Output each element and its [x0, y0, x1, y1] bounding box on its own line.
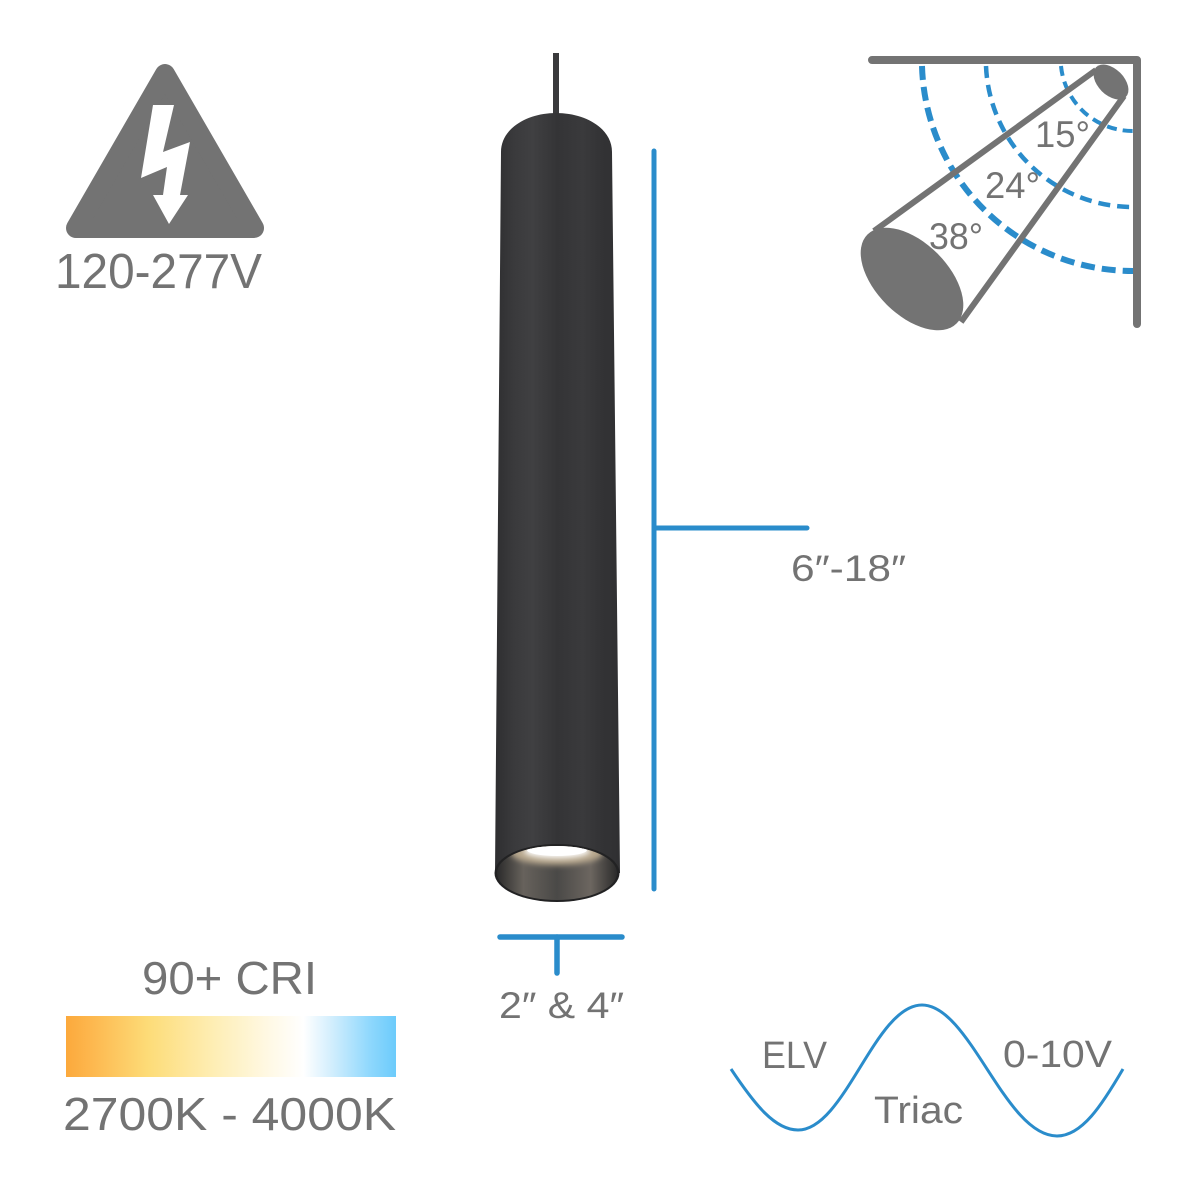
width label: 2″ & 4″: [499, 985, 624, 1026]
beam spread arcs: [922, 66, 1133, 271]
cylinder body: [495, 113, 620, 873]
beam angle diagram: [842, 58, 1137, 349]
color temperature range label: 2700K - 4000K: [63, 1088, 396, 1140]
icon: warning triangle with lightning bolt: [76, 74, 254, 228]
dimming sine wave: [731, 1005, 1123, 1136]
height bracket: [654, 151, 807, 889]
dimming panel: [731, 1005, 1123, 1136]
fixture opening: [494, 841, 620, 902]
angle label 15: 15°: [1035, 114, 1090, 155]
pendant fixture: [494, 53, 620, 902]
color temperature panel: [63, 952, 396, 1140]
width bracket: [500, 937, 622, 973]
voltage label: 120-277V: [55, 245, 262, 299]
height label: 6″-18″: [791, 548, 906, 589]
0-10V label: 0-10V: [1003, 1034, 1113, 1076]
width dimension: [499, 937, 624, 1026]
angle label 38: 38°: [929, 216, 983, 257]
light cone: [842, 58, 1135, 349]
cord: [553, 53, 559, 115]
Triac label: Triac: [874, 1090, 963, 1132]
angle label 24: 24°: [985, 165, 1040, 206]
ELV label: ELV: [762, 1035, 828, 1077]
voltage panel: [55, 74, 262, 299]
CRI label: 90+ CRI: [142, 952, 317, 1004]
color temperature gradient bar: [66, 1016, 396, 1077]
ceiling and wall corner: [872, 60, 1137, 324]
